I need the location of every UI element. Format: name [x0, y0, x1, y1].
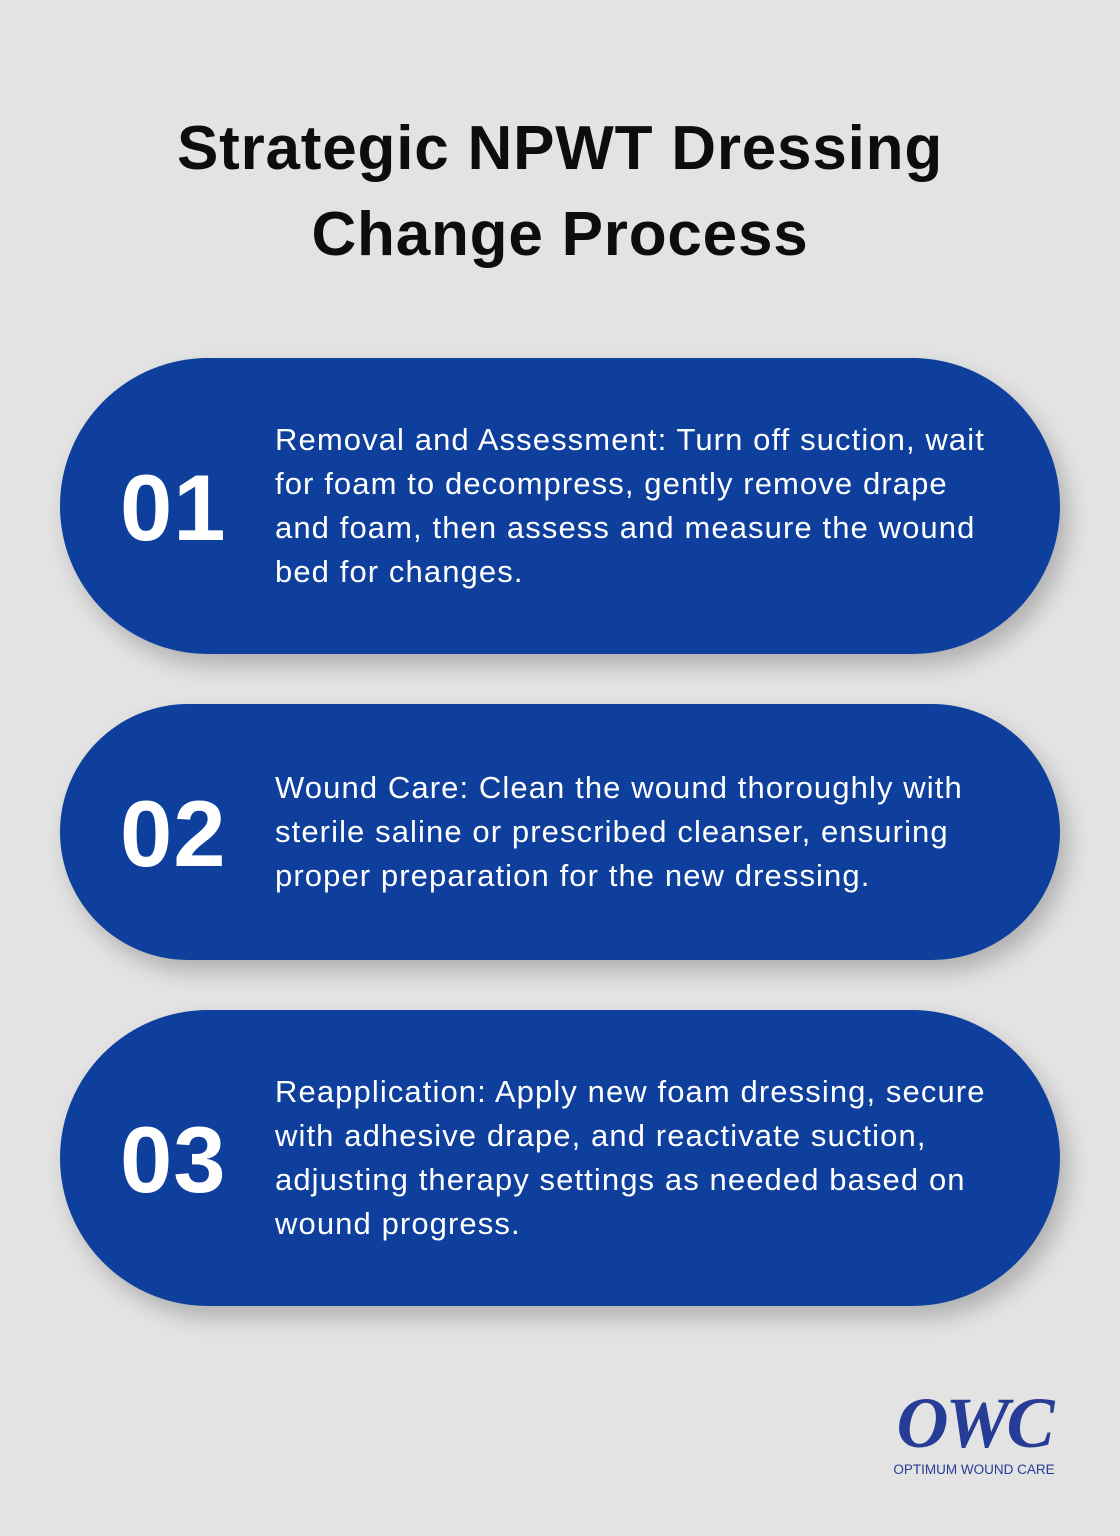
number 01: 01	[120, 455, 227, 560]
text: step 01	[275, 422, 985, 589]
number 03: 03	[120, 1107, 227, 1212]
text: step 03: with adhesive drape, and reactivate suction,	[275, 1118, 927, 1153]
text: step 01: for foam to decompress, gently remove drape	[275, 466, 948, 501]
logo: OWC	[896, 1383, 1052, 1463]
text: step 02: proper preparation for the new dressing.	[275, 858, 870, 893]
text: step 03	[275, 1074, 986, 1241]
title	[177, 114, 943, 269]
text: step 02: sterile saline or prescribed cleanser, ensuring	[275, 814, 949, 849]
text: step 01: and foam, then assess and measure the wound	[275, 510, 975, 545]
text: step 01: bed for changes.	[275, 554, 524, 589]
text: step 01: Removal and Assessment: Turn off suction, wait	[275, 422, 985, 457]
text: step 02	[275, 770, 963, 893]
panel: step 02	[60, 704, 1060, 960]
text: step 03: wound progress.	[275, 1206, 521, 1241]
number 02: 02	[120, 781, 227, 886]
text: step 03: adjusting therapy settings as needed based on	[275, 1162, 966, 1197]
logo: OPTIMUM WOUND CARE	[893, 1462, 1055, 1477]
title: Change Process	[311, 200, 809, 269]
text: step 02: Wound Care: Clean the wound thoroughly with	[275, 770, 963, 805]
panel: step 03	[60, 1010, 1060, 1306]
title: Strategic NPWT Dressing	[177, 114, 943, 183]
text: step 03: Reapplication: Apply new foam dressing, secure	[275, 1074, 986, 1109]
panel: step 01	[60, 358, 1060, 654]
